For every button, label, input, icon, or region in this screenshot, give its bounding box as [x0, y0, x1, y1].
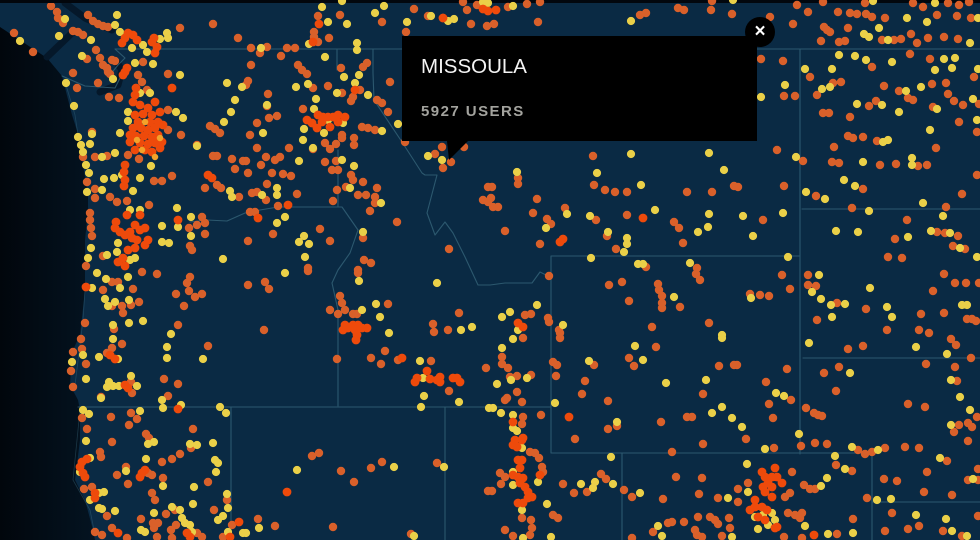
tooltip pointer [447, 141, 468, 160]
tooltip city name: MISSOULA [421, 55, 527, 78]
close button [745, 17, 775, 47]
tooltip [402, 36, 757, 141]
close button: × [754, 21, 766, 42]
ocean [0, 0, 100, 540]
highlight dots inside dense cluster [137, 122, 160, 157]
top edge bar [0, 0, 315, 3]
dense red-orange clusters [80, 9, 814, 537]
straits and sound [47, 3, 122, 92]
tooltip user count: 5927 USERS [421, 103, 525, 120]
